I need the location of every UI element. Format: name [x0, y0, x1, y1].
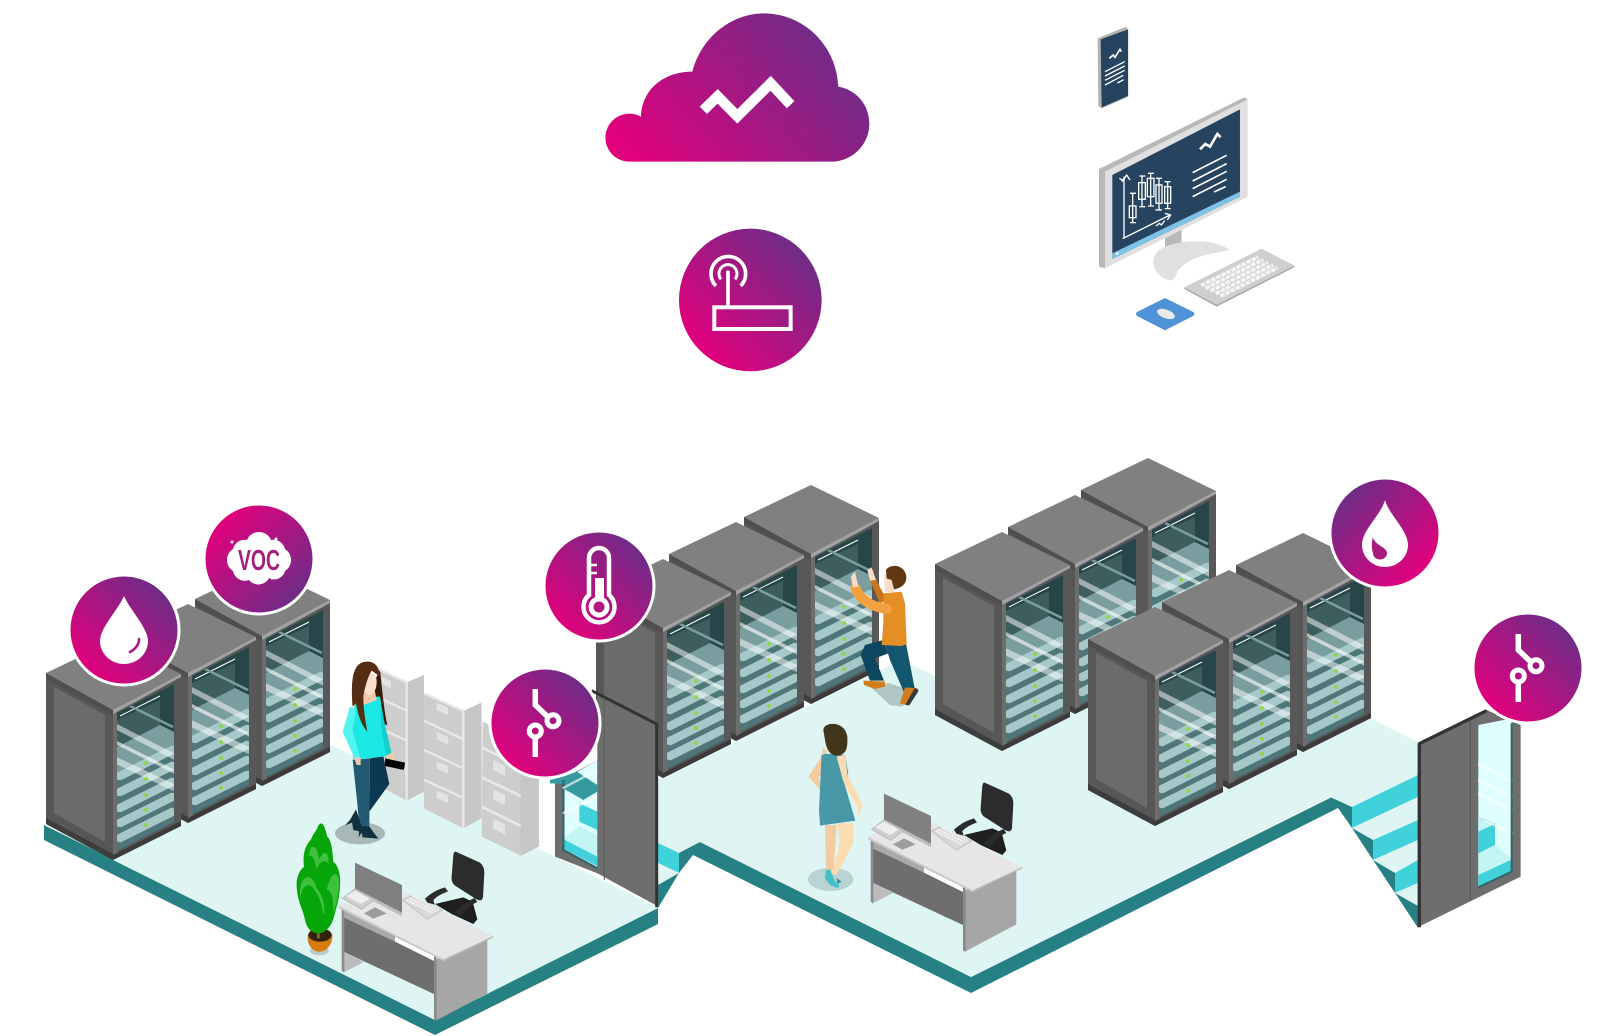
- icon: keyboard: [1184, 249, 1294, 307]
- door: right room glass door: [1418, 710, 1521, 927]
- desk with monitor: left room: [339, 863, 493, 1021]
- sensor badge: water leak right: [1330, 478, 1440, 588]
- person: woman with phone: [335, 662, 405, 844]
- icon: potted plant: [297, 823, 340, 955]
- icon: wireless gateway: [679, 229, 822, 371]
- person: man working at rack: [851, 566, 919, 707]
- server racks: back right row: [935, 458, 1216, 751]
- sensor badge: door contact left: [490, 668, 600, 778]
- floor: left room: [44, 700, 658, 1035]
- sensor badge: VOC: VOC: [238, 545, 280, 577]
- icon: desktop computer with chart: [1099, 97, 1248, 280]
- stairs: right passage: [1352, 775, 1418, 928]
- sensor badge: humidity left: [69, 575, 179, 685]
- stairs: left passage: [658, 820, 700, 908]
- door: left room glass door: [550, 690, 658, 907]
- sensor badge: temperature: [544, 531, 654, 641]
- server racks: centre row: [596, 485, 879, 778]
- office chair: centre room: [954, 783, 1013, 855]
- server racks: front right row: [1088, 533, 1371, 826]
- person: woman in blue dress: [808, 724, 863, 891]
- icon: cloud with signal line: [605, 13, 869, 162]
- icon: smartphone: [1098, 27, 1128, 108]
- floor: centre room: [658, 660, 1418, 993]
- sensor badge: VOC: [204, 504, 314, 614]
- desk with monitor: centre room: [868, 794, 1022, 952]
- icon: mouse on blue pad: [1138, 301, 1192, 328]
- filing cabinets: [380, 670, 539, 856]
- office chair: left room: [425, 852, 484, 924]
- sensor badge: door contact right: [1473, 613, 1583, 723]
- server racks: left row: [46, 567, 330, 860]
